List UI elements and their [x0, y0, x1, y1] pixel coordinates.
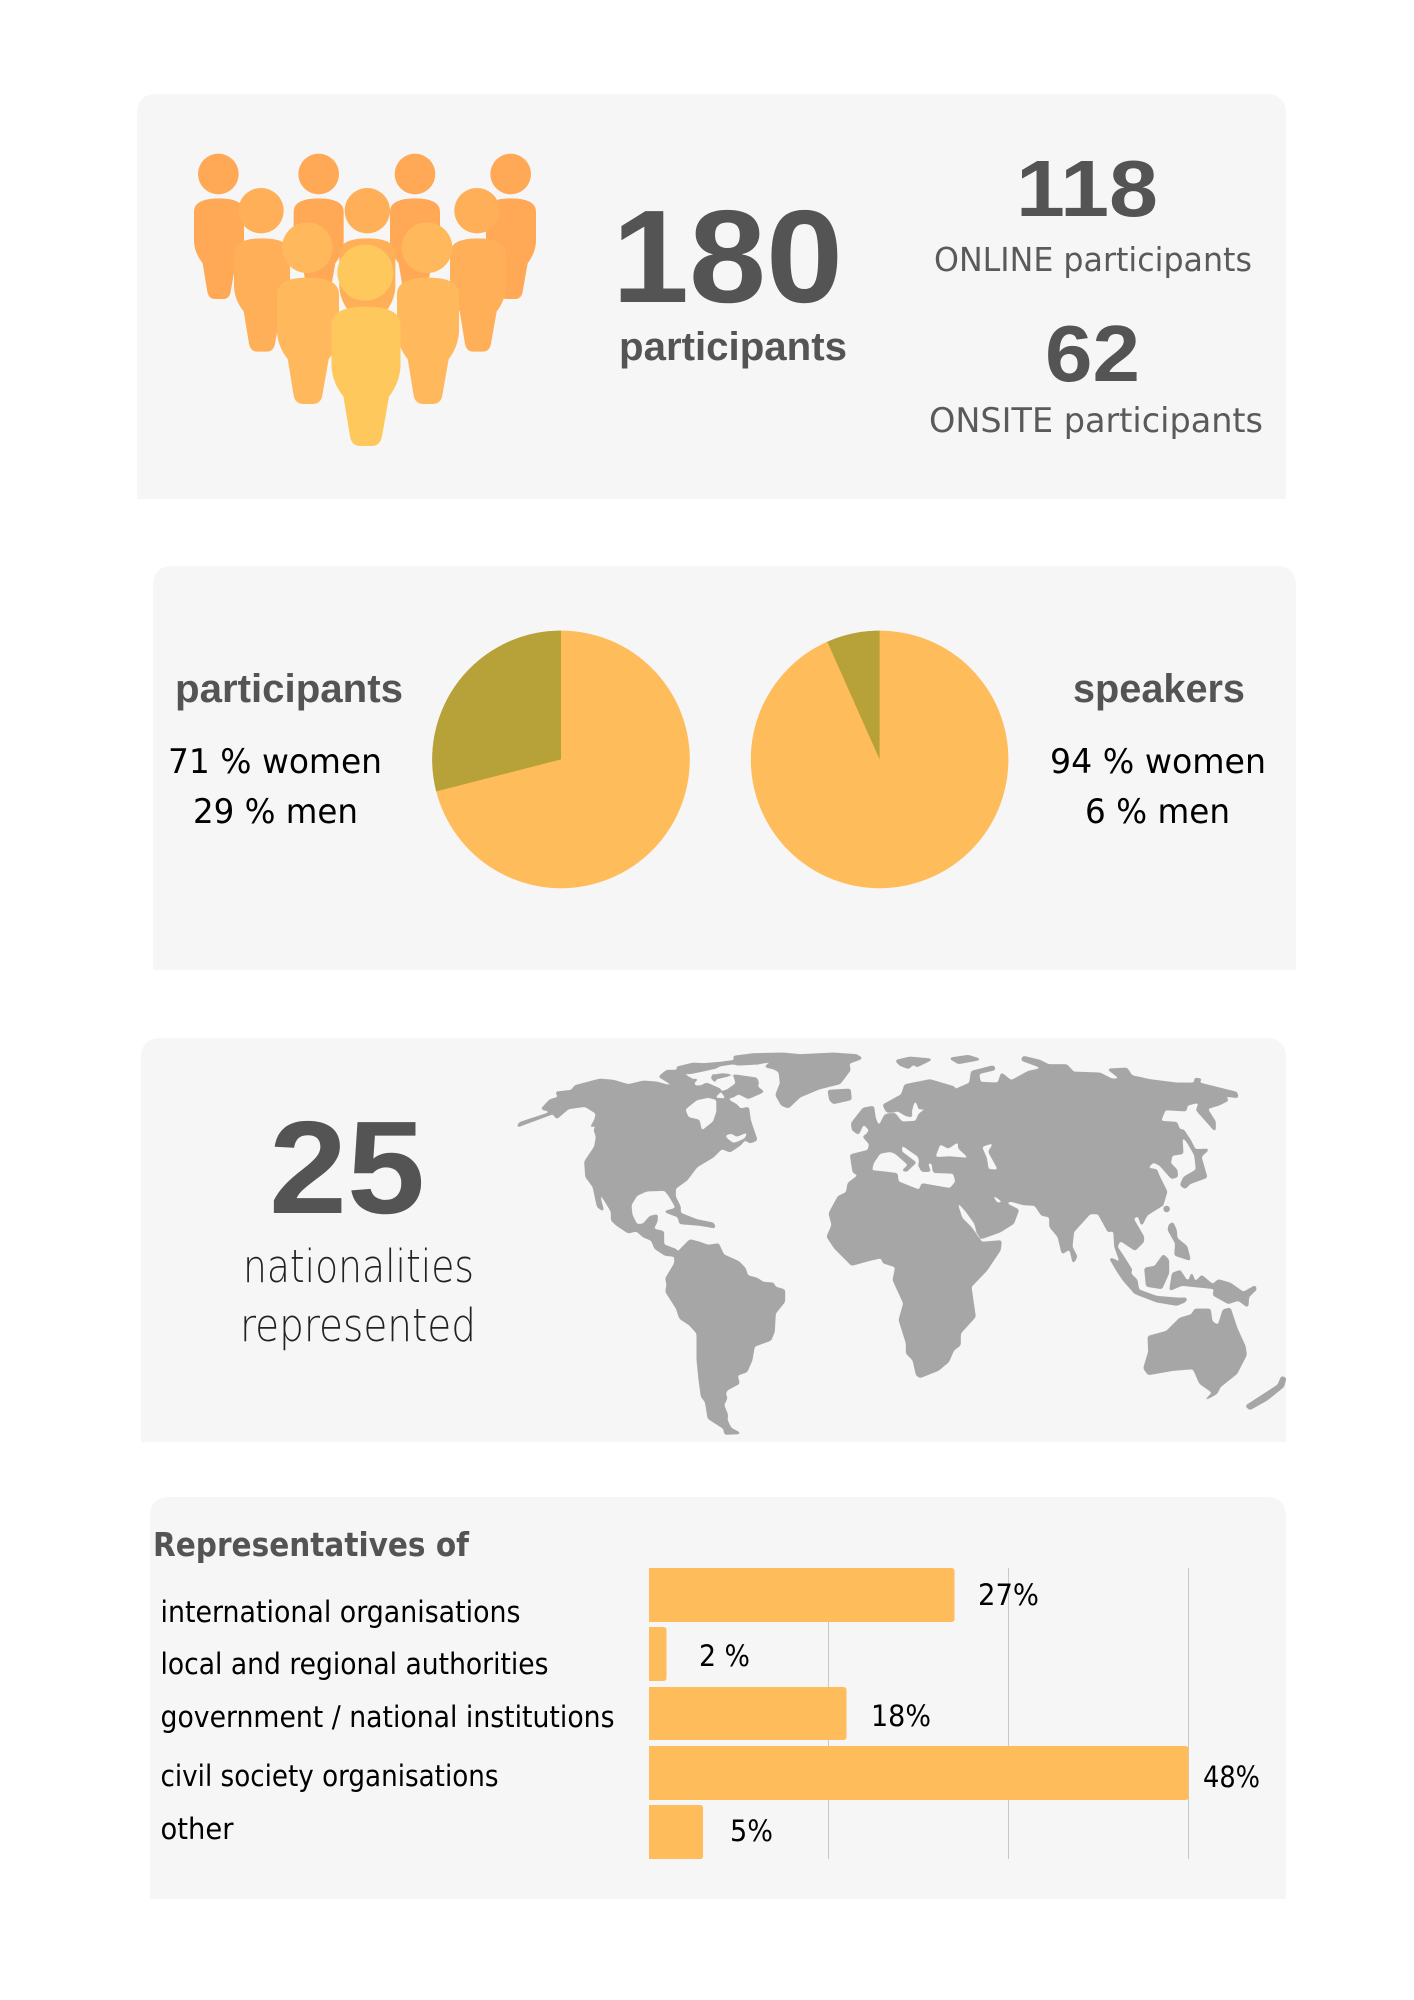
bar: 5%: [649, 1805, 703, 1859]
panel: representatives: [150, 1497, 1286, 1899]
online label: ONLINE participants: [934, 240, 1252, 279]
heading: participants: participants: [175, 667, 403, 711]
label: government / national institutions: government / national institutions: [160, 1700, 614, 1734]
panel: nationalities: [141, 1038, 1286, 1442]
bar: 27%: [649, 1568, 954, 1622]
text: participants men share: 29 % men: [193, 792, 358, 832]
label: civil society organisations: civil society organisations: [160, 1759, 498, 1793]
label: local and regional authorities: local and regional authorities: [160, 1647, 548, 1681]
total participants label: participants: [619, 325, 847, 369]
value: 5%: 5%: [730, 1814, 773, 1848]
bar chart: value labels: [699, 1578, 1260, 1848]
icon: crowd of people: [194, 154, 536, 446]
world map: [517, 1053, 1286, 1434]
label: other: other: [160, 1812, 234, 1846]
value: 18%: 18%: [871, 1699, 931, 1733]
grid lines: [828, 1568, 1188, 1859]
text: speakers men share: 6 % men: [1085, 792, 1230, 832]
value: 2 %: 2 %: [699, 1639, 750, 1673]
label: international organisations: international organisations: [160, 1595, 520, 1629]
nationalities label line 1: nationalities: [243, 1240, 474, 1293]
total participants number: 180: [612, 183, 843, 330]
bar: 2%: [649, 1627, 666, 1681]
bar: 48%: [649, 1746, 1188, 1800]
panel: participants totals: [137, 94, 1286, 499]
pie chart: speakers: [751, 631, 1008, 888]
heading: representatives of: Representatives of: [153, 1525, 470, 1564]
bar: 18%: [649, 1687, 846, 1740]
bar chart: bars: [649, 1568, 1188, 1859]
nationalities label line 2: represented: [240, 1299, 476, 1352]
heading: speakers: speakers: [1073, 667, 1245, 711]
pie chart: participants: [432, 631, 690, 888]
text: speakers women share: 94 % women: [1050, 742, 1266, 782]
online number: 118: [1016, 144, 1158, 233]
value: 48%: 48%: [1203, 1760, 1260, 1794]
onsite label: ONSITE participants: [929, 401, 1263, 441]
text: participants women share: 71 % women: [168, 742, 382, 782]
onsite number: 62: [1045, 309, 1140, 398]
nationalities number: 25: [269, 1094, 425, 1241]
bar chart: category labels: [160, 1595, 614, 1846]
value: 27%: 27%: [978, 1578, 1039, 1612]
panel: gender balance: [153, 566, 1296, 970]
